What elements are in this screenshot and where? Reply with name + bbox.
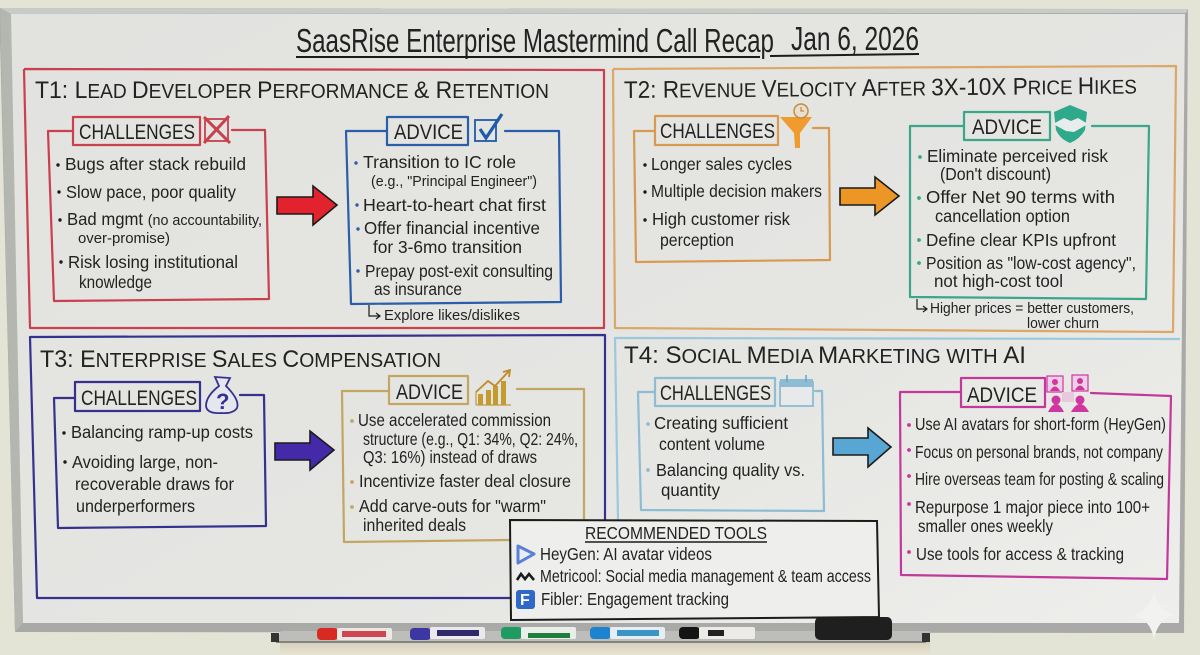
T1 challenges label: CHALLENGES	[79, 121, 195, 144]
T2 advice list: cancellation option	[935, 206, 1070, 226]
T1 advice list	[354, 152, 553, 299]
T2 challenges list: High customer risk	[652, 209, 790, 229]
T4 advice box	[900, 375, 1171, 579]
panel: T2 revenue velocity after price hikes	[613, 66, 1176, 332]
T3 panel border	[30, 335, 605, 598]
T2 advice list: (Don't discount)	[940, 164, 1051, 184]
T3 advice label: ADVICE	[396, 381, 463, 404]
T3 challenges box	[54, 377, 266, 528]
T1 advice list: Heart-to-heart chat first	[363, 195, 546, 215]
T3 advice list	[350, 410, 578, 535]
T4 advice label: ADVICE	[967, 384, 1037, 407]
green marker	[501, 627, 576, 639]
tools heading: RECOMMENDED TOOLS	[585, 523, 767, 543]
T2 footnote	[917, 299, 1134, 332]
panel: T1 lead developer performance and retention	[24, 69, 604, 328]
T1 challenges list: Slow pace, poor quality	[66, 182, 236, 202]
icon: calendar	[780, 375, 813, 406]
arrow: light blue	[833, 428, 891, 467]
T4 challenges list: Creating sufficient	[654, 413, 788, 433]
T4 advice list	[907, 414, 1166, 564]
blue-violet marker	[410, 627, 485, 640]
T2 challenges list: Multiple decision makers	[651, 181, 822, 201]
T3 challenges list: Avoiding large, non-	[72, 452, 218, 472]
T2 heading: T2: REVENUE VELOCITY AFTER 3X-10X PRICE HIKES	[624, 73, 1137, 104]
T4 challenges label: CHALLENGES	[660, 382, 771, 405]
T3 advice list: Incentivize faster deal closure	[359, 471, 571, 491]
arrow: purple	[275, 431, 334, 470]
T3 challenges label: CHALLENGES	[81, 387, 197, 410]
Metricool row: Metricool: Social media management & team access	[540, 566, 871, 586]
T4 challenges list: quantity	[661, 480, 720, 500]
T2 challenges box	[634, 104, 830, 262]
T1 challenges box	[48, 116, 269, 301]
T3 advice list: Add carve-outs for "warm"	[359, 496, 546, 516]
HeyGen row: HeyGen: AI avatar videos	[540, 544, 712, 564]
T2 challenges list: perception	[660, 230, 734, 250]
icon: funnel with clock	[780, 104, 812, 148]
T2 advice list: Position as "low-cost agency",	[926, 253, 1136, 273]
T2 advice box	[910, 105, 1149, 299]
red marker	[317, 628, 392, 640]
T3 challenges list: recoverable draws for	[75, 474, 234, 494]
T4 advice list: smaller ones weekly	[918, 516, 1053, 536]
T3 advice list: Use accelerated commission	[358, 410, 551, 430]
T1 footnote: Explore likes/dislikes	[384, 307, 520, 324]
T4 challenges list: content volume	[659, 434, 765, 454]
arrow: orange	[840, 177, 899, 215]
T1 challenges list: Bugs after stack rebuild	[65, 154, 246, 174]
T1 advice list: Transition to IC role	[363, 152, 516, 172]
icon: money bag with question mark	[206, 377, 238, 414]
T2 challenges list: Longer sales cycles	[651, 154, 792, 174]
T1 panel border	[24, 69, 604, 328]
T1 challenges list	[56, 154, 262, 292]
icon: avatars chat	[1047, 375, 1089, 412]
icon: shield with handshake	[1053, 105, 1088, 143]
T4 advice list: Use tools for access & tracking	[916, 544, 1124, 564]
eraser	[815, 617, 892, 640]
T3 challenges list: Balancing ramp-up costs	[71, 422, 253, 442]
T2 footnote: lower churn	[1027, 315, 1099, 332]
T3 advice list: inherited deals	[363, 515, 466, 535]
T1 advice box	[346, 114, 561, 304]
T4 advice list: Repurpose 1 major piece into 100+	[915, 497, 1150, 517]
T1 advice list: Prepay post-exit consulting	[365, 261, 553, 281]
panel: T4 social media marketing with AI	[615, 338, 1180, 579]
icon: red crossed box	[204, 116, 230, 143]
T4 challenges box	[638, 375, 824, 511]
black marker	[679, 627, 755, 639]
watermark sparkle	[1134, 590, 1174, 640]
T3 heading: T3: ENTERPRISE SALES COMPENSATION	[40, 346, 441, 373]
T3 advice list: structure (e.g., Q1: 34%, Q2: 24%,	[363, 429, 578, 449]
title: Jan 6, 2026	[791, 20, 919, 57]
arrow: red	[277, 186, 337, 225]
T3 advice box	[342, 370, 584, 542]
T3 challenges list	[62, 422, 253, 516]
panel: T3 enterprise sales compensation	[30, 335, 605, 598]
marker tray	[271, 631, 930, 643]
Fibler row: F	[520, 592, 530, 609]
T2 challenges list	[643, 154, 822, 250]
T1 challenges list: Bad mgmt (no accountability,	[67, 209, 262, 229]
T4 heading: T4: SOCIAL MEDIA MARKETING WITH AI	[624, 342, 1026, 369]
T1 challenges list: over-promise)	[78, 230, 170, 247]
T1 heading: T1: LEAD DEVELOPER PERFORMANCE & RETENTION	[35, 77, 549, 104]
T1 advice list: Offer financial incentive	[364, 218, 540, 238]
blue marker	[590, 627, 665, 639]
T2 advice list	[917, 146, 1136, 291]
panel: recommended tools	[510, 520, 879, 620]
icon: rising bar chart	[476, 370, 511, 405]
T1 challenges list: Risk losing institutional	[68, 252, 238, 272]
T1 advice list: as insurance	[374, 279, 462, 299]
T2 challenges label: CHALLENGES	[660, 120, 775, 143]
T2 advice list: Offer Net 90 terms with	[926, 187, 1115, 207]
floor shadow	[280, 642, 930, 655]
T3 advice list: Q3: 16%) instead of draws	[363, 447, 537, 467]
T4 panel border	[615, 338, 1180, 520]
icon: money bag with question mark: ?	[216, 389, 229, 414]
T2 advice list: Define clear KPIs upfront	[926, 230, 1116, 250]
icon: blue check box	[475, 114, 502, 141]
T4 challenges list: Balancing quality vs.	[656, 460, 805, 480]
T2 panel border	[613, 66, 1176, 332]
title: SaasRise Enterprise Mastermind Call Recap	[296, 22, 774, 59]
T1 advice list: (e.g., "Principal Engineer")	[371, 173, 537, 190]
Fibler row: Fibler: Engagement tracking	[541, 589, 729, 609]
T2 advice label: ADVICE	[972, 116, 1042, 139]
T2 advice list: not high-cost tool	[934, 271, 1063, 291]
T1 advice list: for 3-6mo transition	[373, 237, 522, 257]
T2 footnote: Higher prices = better customers,	[930, 300, 1134, 317]
T4 challenges list	[646, 413, 805, 500]
T3 challenges list: underperformers	[76, 496, 195, 516]
T1 advice label: ADVICE	[394, 121, 463, 144]
T2 advice list: Eliminate perceived risk	[927, 146, 1108, 166]
T1 challenges list: knowledge	[79, 272, 152, 292]
